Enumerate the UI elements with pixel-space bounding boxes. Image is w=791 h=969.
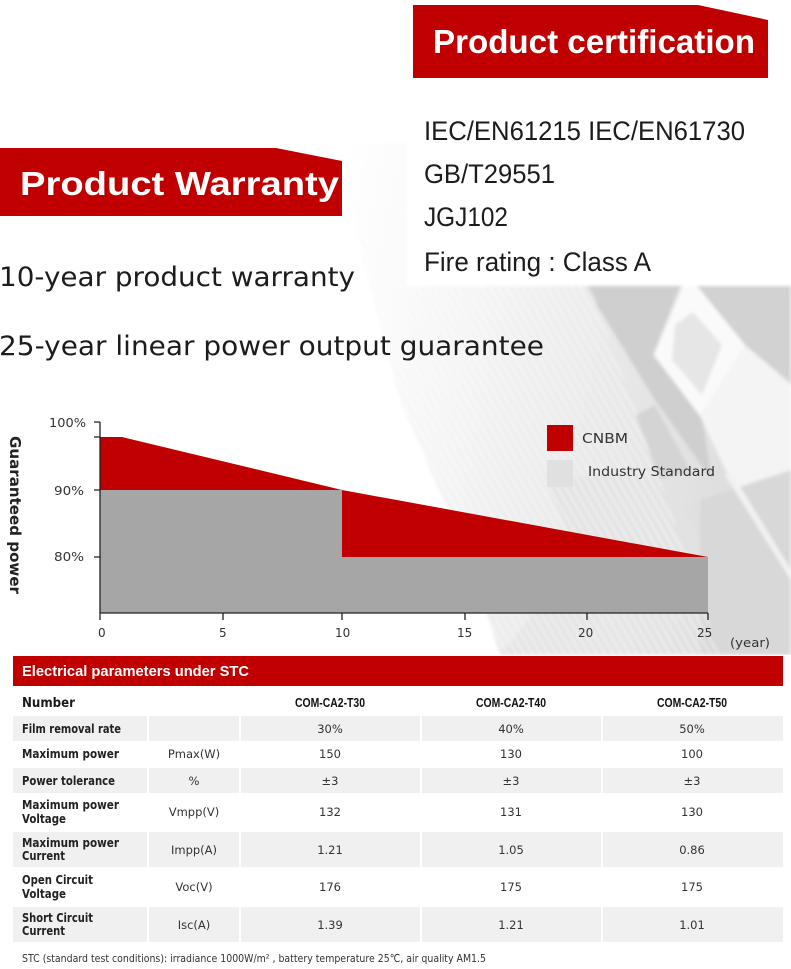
row: open circuit voltage: Voltage [22,887,66,901]
warranty text: 25-year linear power output guarantee [0,331,544,362]
row: open circuit voltage: Open Circuit [22,873,93,887]
row: open circuit voltage: 175 [681,880,703,894]
row: open circuit voltage: 175 [500,880,522,894]
red area: CNBM [100,437,708,557]
row: maximum power voltage: 130 [681,805,703,819]
warranty text: 10-year product warranty [0,262,355,293]
chart: guaranteed power [6,416,770,650]
axis labels: 15 [457,626,472,640]
row: short circuit current: Short Circuit [22,911,93,925]
row: power tolerance [22,774,700,788]
table title bar: Electrical parameters under STC [22,663,249,680]
gray area: industry standard [100,490,708,613]
row: maximum power voltage: Voltage [22,812,66,826]
row: film removal rate: Film removal rate [22,722,121,736]
certification list: Fire rating : Class A [424,247,651,277]
row: maximum power: 130 [500,747,522,761]
row: maximum power: Maximum power [22,747,119,761]
axes [94,422,708,620]
row: short circuit current: 1.39 [317,918,343,932]
row: maximum power voltage: 132 [319,805,341,819]
header row: Number [22,696,76,711]
axis labels: 10 [335,626,350,640]
certification list: GB/T29551 [424,159,555,189]
axis labels: 0 [98,626,106,640]
row: film removal rate: 40% [498,722,524,736]
row: short circuit current: Isc(A) [178,918,210,932]
row: short circuit current: 1.01 [679,918,705,932]
row: short circuit current: 1.21 [498,918,524,932]
row: power tolerance: ±3 [322,774,338,788]
row: power tolerance: % [189,774,200,788]
banner: product warranty: Product Warranty [20,165,340,202]
certification list: JGJ102 [424,202,508,232]
row: maximum power [22,747,703,761]
banner: product certification [413,5,768,78]
axis labels: 5 [219,626,227,640]
row: maximum power: 100 [681,747,703,761]
warranty text [0,262,544,362]
shaded rows [13,716,783,942]
header row: COM-CA2-T30 [295,695,365,710]
white table background [0,655,791,969]
row: maximum power current: Current [22,849,65,863]
axis labels: (year) [730,636,770,650]
banner: product warranty [0,148,342,216]
axis labels: 90% [54,484,84,498]
footnote: STC (standard test conditions): irradiance 1000W/m² , battery temperature 25℃, air quality AM1.5 [22,952,486,965]
row: open circuit voltage [22,873,703,901]
legend: Industry Standard [588,465,715,480]
row: open circuit voltage: 176 [319,880,341,894]
row: maximum power current: 0.86 [679,843,705,857]
table title bar [13,656,783,686]
axis labels: 25 [697,626,712,640]
header row [22,695,727,711]
certification list [424,116,745,277]
axis labels: 100% [49,416,86,430]
header row: COM-CA2-T40 [476,695,546,710]
row: open circuit voltage: Voc(V) [175,880,213,894]
axis labels [49,416,770,650]
legend [547,425,715,487]
row: maximum power voltage: 131 [500,805,522,819]
row: maximum power voltage: Maximum power [22,798,119,812]
row: film removal rate: 30% [317,722,343,736]
row: short circuit current: Current [22,924,65,938]
row: maximum power: 150 [319,747,341,761]
y axis title: Guaranteed power [6,436,24,595]
table: electrical parameters [13,656,783,942]
row: maximum power current: Impp(A) [171,843,217,857]
row: short circuit current [22,911,705,938]
legend: CNBM [582,432,628,447]
row: maximum power: Pmax(W) [168,747,220,761]
row: maximum power voltage [22,798,703,826]
row: film removal rate [22,722,705,736]
row: power tolerance: Power tolerance [22,774,115,788]
row: film removal rate: 50% [679,722,705,736]
row: maximum power current: 1.05 [498,843,524,857]
header row: COM-CA2-T50 [657,695,727,710]
row: maximum power voltage: Vmpp(V) [169,805,219,819]
row: power tolerance: ±3 [503,774,519,788]
row: power tolerance: ±3 [684,774,700,788]
row: maximum power current: 1.21 [317,843,343,857]
background: building photo [340,143,791,655]
certification list: IEC/EN61215 IEC/EN61730 [424,116,745,146]
row: maximum power current [22,836,705,863]
axis labels: 80% [54,550,84,564]
banner: product certification: Product certification [433,23,755,60]
axis labels: 20 [578,626,593,640]
row: maximum power current: Maximum power [22,836,119,850]
